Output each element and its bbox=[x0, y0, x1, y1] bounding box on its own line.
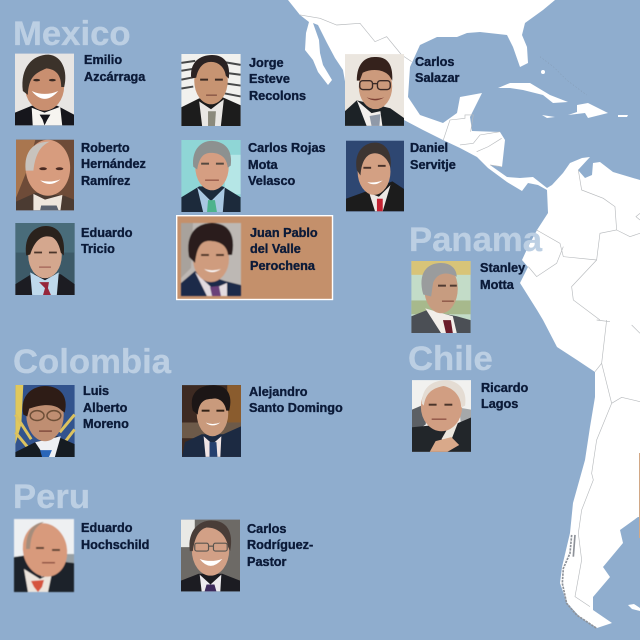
portrait: Jorge Esteve Recolons bbox=[181, 54, 241, 126]
map: southern Chile fjords bbox=[562, 535, 597, 628]
portrait: Alejandro Santo Domingo bbox=[182, 385, 241, 457]
name: Ricardo Lagos: Lagos bbox=[481, 397, 518, 411]
name: Jorge Esteve Recolons: Jorge bbox=[249, 56, 284, 70]
person: Luis Alberto Moreno bbox=[15, 384, 129, 457]
name: Stanley Motta: Motta bbox=[480, 278, 515, 292]
name: Luis Alberto Moreno: Moreno bbox=[83, 417, 129, 431]
name: Carlos Salazar: Carlos bbox=[415, 55, 454, 69]
portrait: Emilio Azcarraga bbox=[15, 54, 74, 126]
name: Juan Pablo del Valle Perochena: Juan Pablo bbox=[250, 226, 318, 240]
name: Stanley Motta: Stanley bbox=[480, 261, 525, 275]
portrait: Daniel Servitje bbox=[346, 140, 404, 212]
map: Caribbean islands bbox=[498, 70, 640, 611]
name: Emilio Azcarraga: Azcárraga bbox=[84, 70, 146, 84]
portrait: Eduardo Hochschild bbox=[13, 518, 75, 593]
person: Carlos Salazar bbox=[345, 54, 459, 126]
name: Alejandro Santo Domingo: Santo Domingo bbox=[249, 401, 343, 415]
highlight panel bbox=[177, 216, 332, 300]
name: Eduardo Tricio: Eduardo bbox=[81, 226, 133, 240]
name: Emilio Azcarraga: Emilio bbox=[84, 53, 122, 67]
name: Juan Pablo del Valle Perochena: Perochena bbox=[250, 259, 316, 273]
person: Jorge Esteve Recolons bbox=[181, 54, 306, 126]
name: Luis Alberto Moreno: Alberto bbox=[83, 401, 128, 415]
name: Eduardo Tricio: Tricio bbox=[81, 242, 115, 256]
name: Eduardo Hochschild: Eduardo bbox=[81, 521, 133, 535]
portrait: Stanley Motta bbox=[411, 261, 471, 333]
person highlight: Juan Pablo del Valle Perochena bbox=[177, 216, 332, 300]
person: Eduardo Tricio bbox=[15, 223, 133, 295]
name: Jorge Esteve Recolons: Recolons bbox=[249, 89, 306, 103]
name: Carlos Rojas Mota Velasco: Mota bbox=[248, 158, 279, 172]
map: country borders south bbox=[575, 320, 640, 607]
portrait: Carlos Rojas Mota Velasco bbox=[181, 140, 241, 212]
name: Roberto Hernandez Ramirez: Roberto bbox=[81, 141, 130, 155]
map: Americas landmass bbox=[288, 0, 640, 628]
portrait: Luis Alberto Moreno bbox=[14, 385, 76, 457]
portrait: Eduardo Tricio bbox=[15, 223, 75, 295]
name: Carlos Rodriguez-Pastor: Rodríguez- bbox=[247, 538, 313, 552]
map: Galapagos islands bbox=[445, 245, 452, 250]
person: Carlos Rodriguez-Pastor bbox=[181, 520, 313, 591]
name: Juan Pablo del Valle Perochena: del Valle bbox=[250, 242, 301, 256]
name: Eduardo Hochschild: Hochschild bbox=[81, 538, 149, 552]
heading: Mexico: Mexico bbox=[13, 15, 131, 53]
person: Alejandro Santo Domingo bbox=[182, 385, 343, 457]
person: Daniel Servitje bbox=[346, 141, 456, 211]
map: country borders north and central bbox=[300, 15, 640, 320]
heading: Panama: Panama bbox=[409, 221, 543, 259]
name: Ricardo Lagos: Ricardo bbox=[481, 381, 528, 395]
name: Carlos Rodriguez-Pastor: Pastor bbox=[247, 555, 287, 569]
name: Daniel Servitje: Daniel bbox=[410, 141, 448, 155]
person: Roberto Hernandez Ramirez bbox=[16, 140, 146, 210]
person: Carlos Rojas Mota Velasco bbox=[181, 140, 326, 212]
portrait: Carlos Salazar bbox=[345, 54, 404, 126]
name: Alejandro Santo Domingo: Alejandro bbox=[249, 385, 308, 399]
heading: Peru: Peru bbox=[13, 478, 90, 516]
heading: Chile: Chile bbox=[408, 340, 493, 378]
person: Stanley Motta bbox=[411, 261, 525, 333]
portrait: Carlos Rodriguez-Pastor bbox=[181, 520, 240, 592]
name: Carlos Rodriguez-Pastor: Carlos bbox=[247, 522, 286, 536]
name: Carlos Rojas Mota Velasco: Carlos Rojas bbox=[248, 141, 326, 155]
name: Roberto Hernandez Ramirez: Ramírez bbox=[81, 174, 130, 188]
name: Jorge Esteve Recolons: Esteve bbox=[249, 72, 290, 86]
person: Emilio Azcarraga bbox=[15, 53, 146, 125]
portrait: Ricardo Lagos bbox=[412, 380, 471, 452]
portrait: Roberto Hernandez Ramirez bbox=[16, 140, 74, 210]
name: Daniel Servitje: Servitje bbox=[410, 158, 456, 172]
name: Carlos Rojas Mota Velasco: Velasco bbox=[248, 174, 296, 188]
heading: Colombia: Colombia bbox=[13, 343, 172, 381]
name: Luis Alberto Moreno: Luis bbox=[83, 384, 109, 398]
person: Ricardo Lagos bbox=[412, 380, 528, 452]
map: edge sliver bbox=[639, 453, 640, 538]
name: Roberto Hernandez Ramirez: Hernández bbox=[81, 157, 146, 171]
portrait: Juan Pablo del Valle Perochena bbox=[180, 222, 242, 297]
person: Eduardo Hochschild bbox=[14, 519, 149, 592]
name: Carlos Salazar: Salazar bbox=[415, 71, 459, 85]
